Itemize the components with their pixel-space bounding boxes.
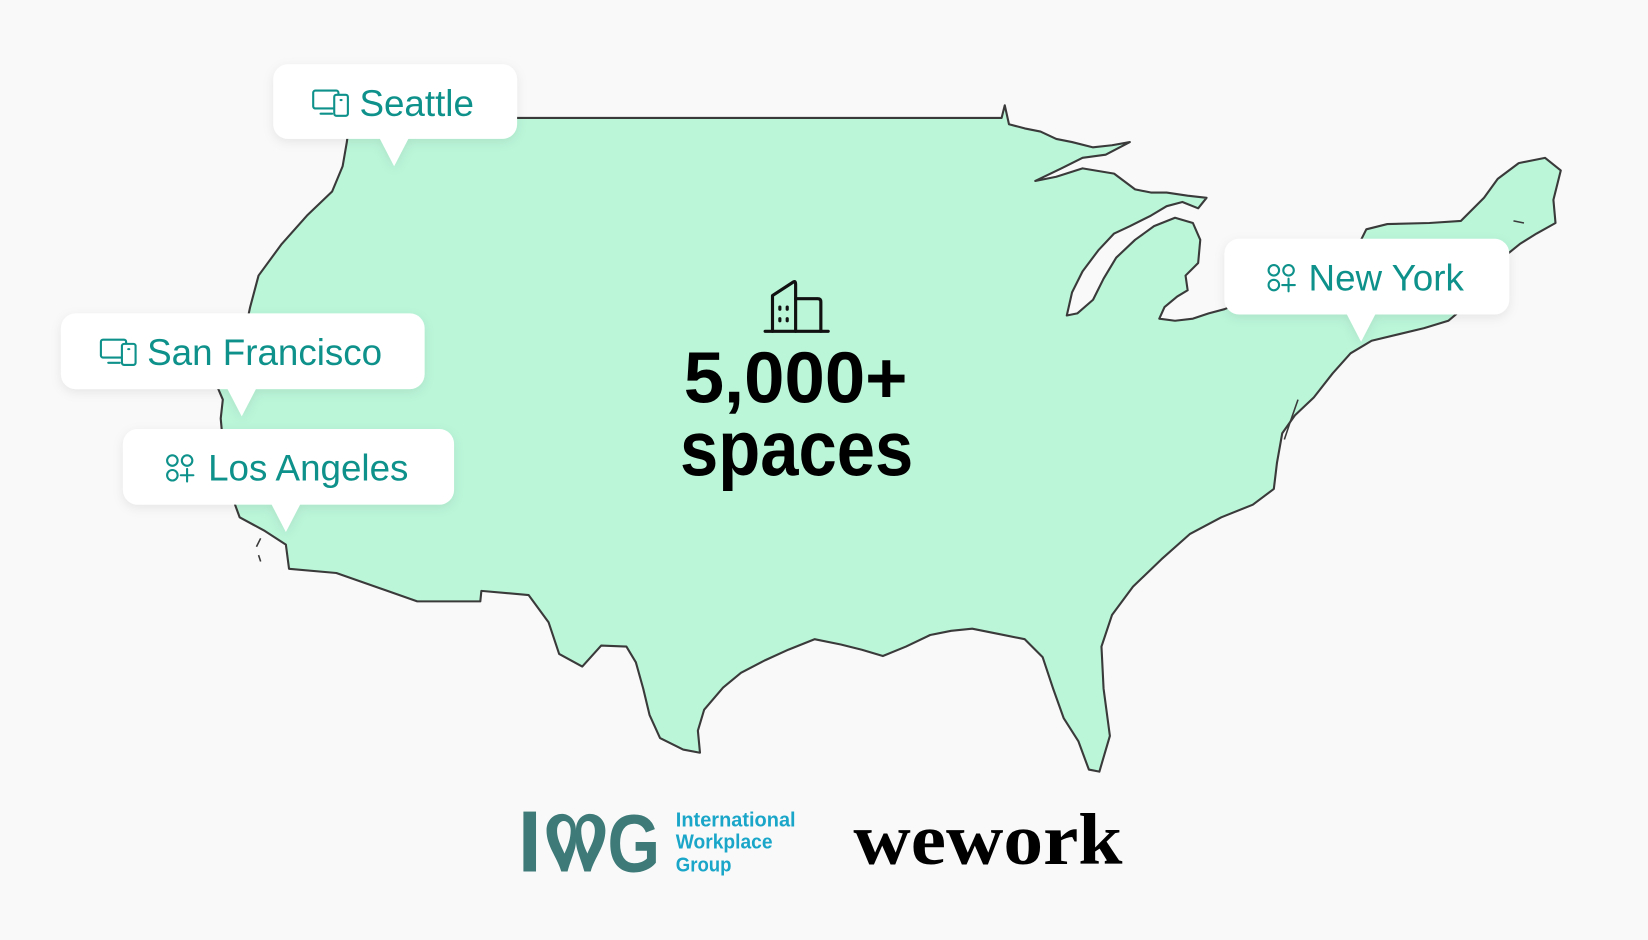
icon: devices (313, 91, 348, 116)
icon: devices (101, 340, 136, 365)
logo: IWG: International (676, 809, 796, 831)
callout: New York (1224, 239, 1509, 342)
icon: apps (1269, 265, 1295, 291)
callout: San Francisco (61, 313, 425, 416)
label: Los Angeles: Los Angeles (208, 448, 408, 489)
label: San Francisco: San Francisco (147, 332, 382, 373)
logo: IWG (523, 798, 796, 889)
icon: building (765, 282, 828, 331)
headline: 5,000+ spaces: 5,000+ (684, 338, 908, 419)
callout: Seattle (273, 64, 517, 166)
logo: IWG: G (607, 798, 660, 889)
headline: 5,000+ spaces (680, 338, 913, 492)
logo: IWG: Group (676, 854, 732, 876)
headline: 5,000+ spaces: spaces (680, 406, 913, 492)
label: New York: New York (1309, 257, 1464, 298)
map: contiguous United States (217, 105, 1561, 772)
logo: wework: wework (853, 798, 1123, 880)
logo: IWG: Workplace (676, 831, 772, 853)
label: Seattle: Seattle (359, 83, 474, 124)
icon: apps (167, 455, 193, 482)
callout: Los Angeles (123, 429, 454, 532)
